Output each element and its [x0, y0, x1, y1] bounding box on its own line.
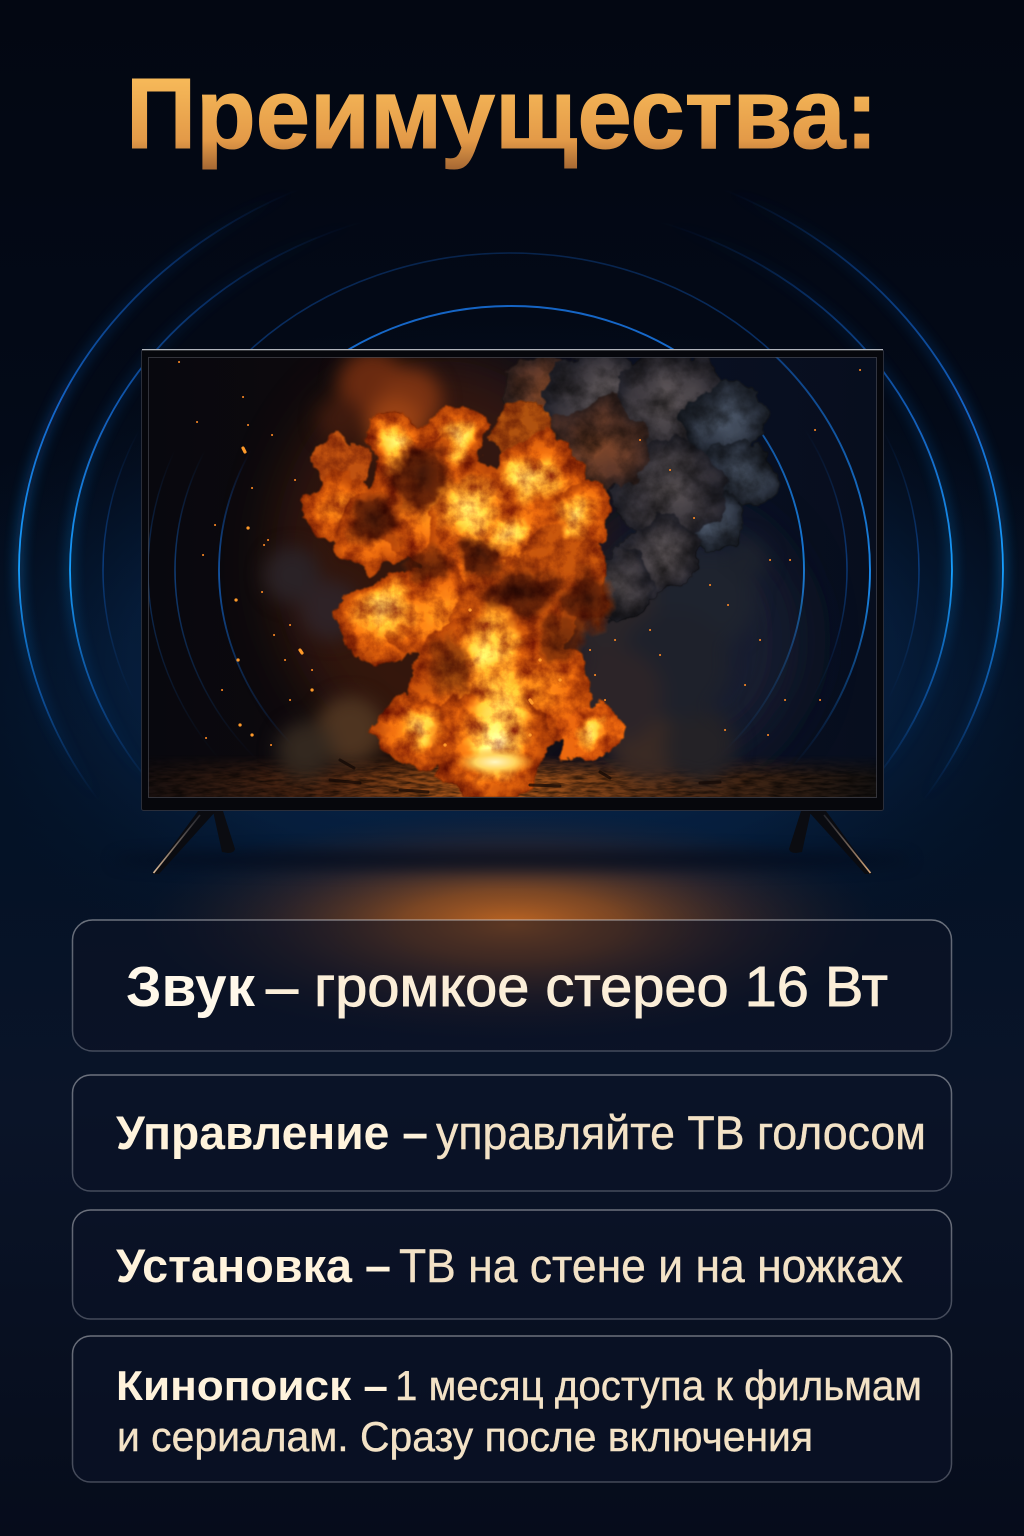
dust and distant smoke [264, 351, 767, 781]
fireball [304, 400, 622, 805]
sparks [179, 362, 860, 745]
card: kinopoisk [72, 1336, 952, 1482]
TV top edge highlight [142, 349, 883, 350]
title: Преимущества: [126, 58, 878, 170]
floor reflection glow [112, 810, 912, 1040]
TV stand legs [152, 811, 872, 874]
card: control [72, 1075, 952, 1191]
TV screen with explosion [148, 357, 876, 797]
card text: kinopoisk: Кинопоиск – [116, 1362, 388, 1409]
card text: sound: – громкое стерео 16 Вт [266, 955, 888, 1019]
TV bezel [142, 350, 884, 810]
card: sound [72, 920, 952, 1051]
card text: installation: ТВ на стене и на ножках [399, 1239, 903, 1292]
ground [148, 755, 877, 797]
card: installation [72, 1210, 952, 1319]
sound-wave rings [19, 148, 1003, 992]
upper smoke cloud [505, 343, 774, 619]
TV [141, 349, 884, 874]
TV screen inner frame [148, 358, 876, 798]
card text: control: управляйте ТВ голосом [436, 1106, 926, 1159]
card text: installation: Установка – [116, 1239, 391, 1292]
card text: sound: Звук [126, 955, 255, 1019]
card text: kinopoisk: 1 месяц доступа к фильмам [395, 1362, 922, 1409]
card text: kinopoisk: и сериалам. Сразу после включения [117, 1413, 813, 1460]
card text: control: Управление – [116, 1106, 428, 1159]
